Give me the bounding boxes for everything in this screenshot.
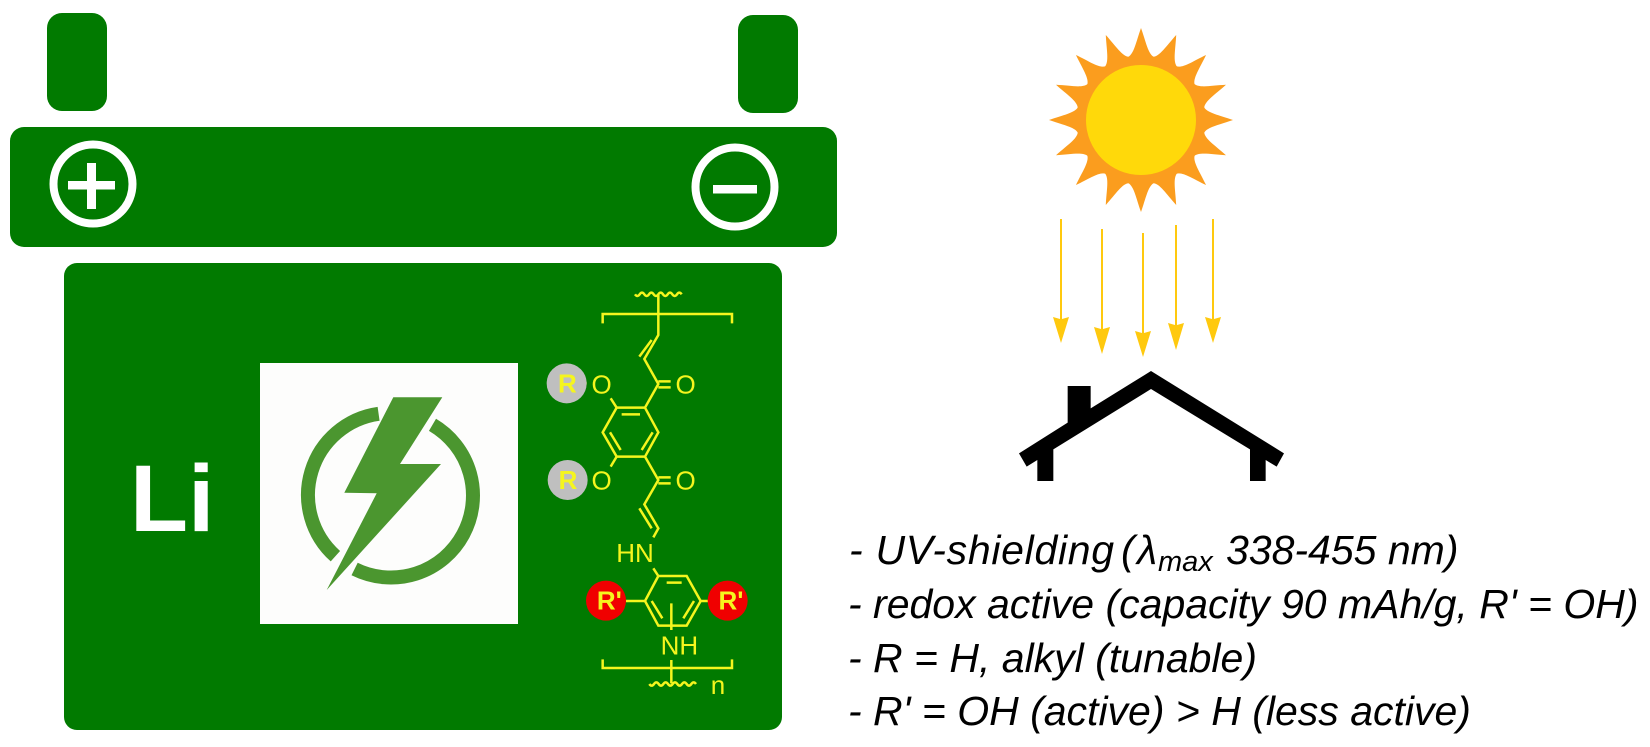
property: UV-shielding: - UV-shielding: [849, 527, 1127, 573]
panel: battery: [10, 13, 837, 730]
property: R group: - R = H, alkyl (tunable): [848, 635, 1257, 681]
structure atom labels: R': [719, 586, 743, 616]
text block: properties: [848, 527, 1639, 734]
Li label: Li: [130, 446, 214, 552]
icon: plus sign: [54, 144, 132, 224]
icon: minus sign: [696, 148, 774, 226]
icon: house roof: [1019, 371, 1284, 481]
icon: sun: [1049, 28, 1233, 212]
structure atom labels: R': [597, 586, 622, 616]
structure atom labels: O: [676, 466, 696, 496]
icon: power bolt tile: [260, 363, 518, 624]
structure atom labels: R: [559, 465, 578, 495]
structure atom labels: [558, 368, 743, 700]
battery right terminal: [738, 15, 798, 113]
battery body: [64, 263, 782, 730]
chemical structure: polymer repeat unit: [547, 293, 748, 700]
property: redox active: - redox active (capacity 90 mAh/g, R' = OH): [848, 581, 1639, 627]
property: UV-shielding: 338-455 nm): [1226, 527, 1458, 573]
structure atom labels: HN: [616, 538, 654, 568]
structure atom labels: O: [592, 466, 612, 496]
battery left terminal: [47, 13, 107, 111]
battery top bar: [10, 127, 837, 247]
structure atom labels: NH: [661, 630, 698, 660]
structure atom labels: O: [592, 369, 612, 399]
structure atom labels: R: [558, 368, 577, 398]
structure atom labels: n: [711, 670, 725, 700]
arrows: sunlight rays: [1053, 219, 1221, 357]
structure atom labels: O: [676, 369, 696, 399]
R group circles: [547, 363, 748, 621]
property: UV-shielding: (: [1121, 527, 1139, 573]
property: UV-shielding: max: [1158, 546, 1214, 578]
property: R prime group: - R' = OH (active) > H (less active): [848, 688, 1471, 734]
property: UV-shielding: λ: [1135, 527, 1157, 573]
